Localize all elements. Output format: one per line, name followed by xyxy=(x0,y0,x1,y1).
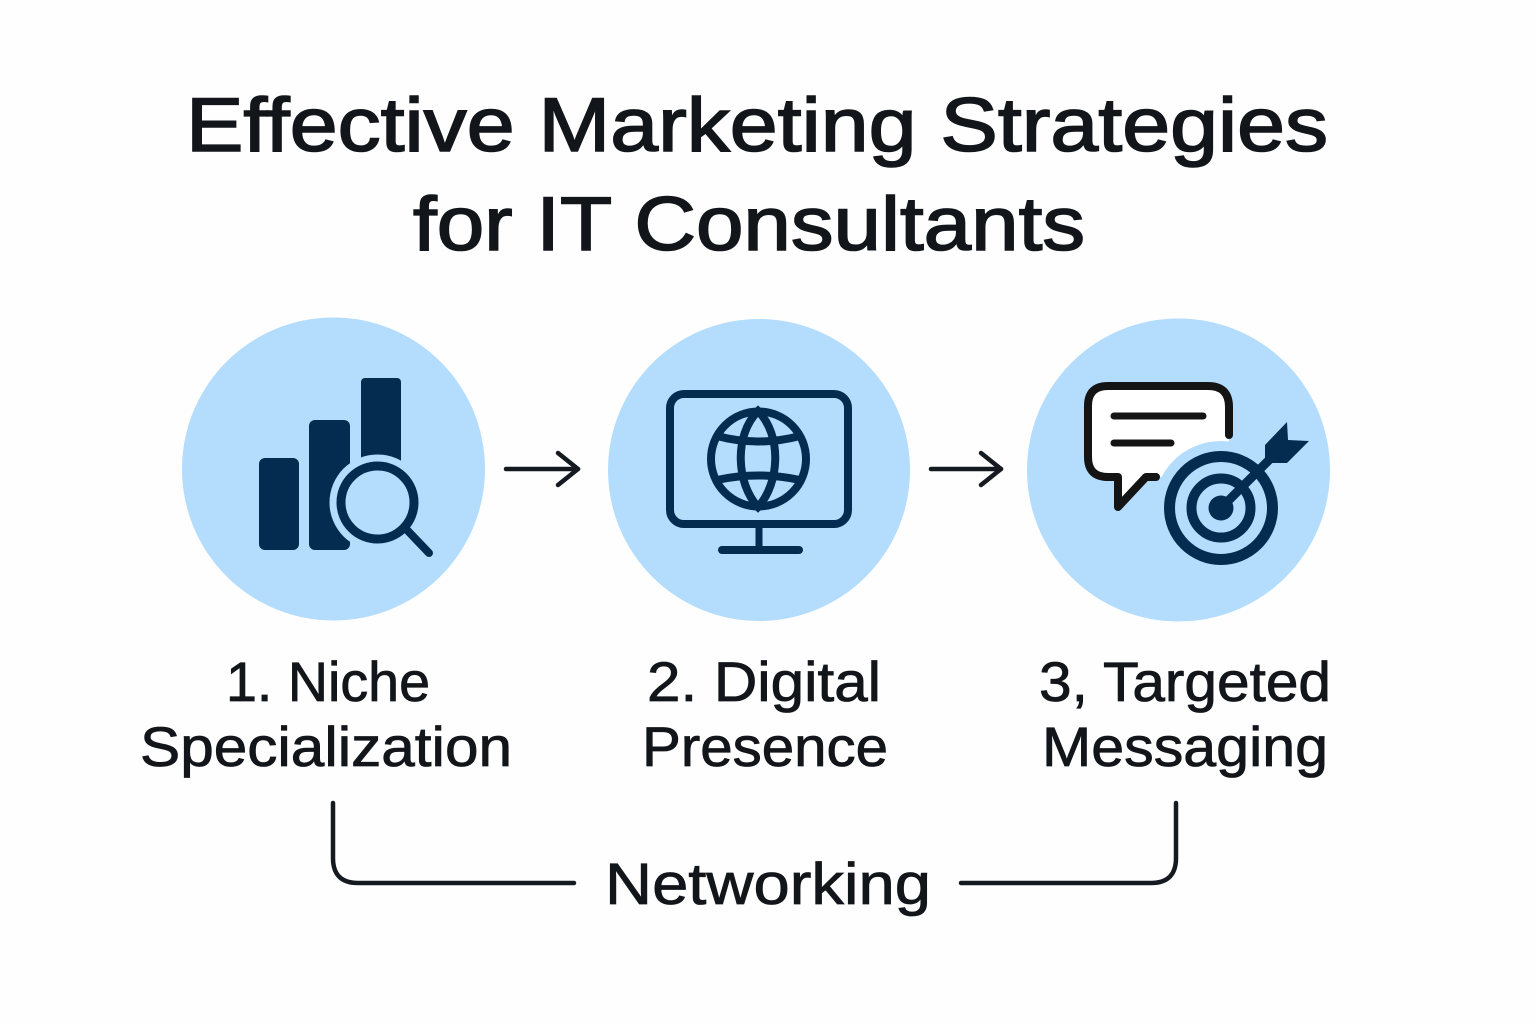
label: networking: Networking xyxy=(605,852,931,917)
icon: digital presence circle xyxy=(608,319,910,621)
arrow: step 2 to step 3 xyxy=(931,453,1001,485)
title xyxy=(186,83,1328,267)
bracket: right networking connector xyxy=(961,803,1176,883)
arrow: step 1 to step 2 xyxy=(506,453,578,485)
bracket: left networking connector xyxy=(333,803,574,883)
label: step 1 xyxy=(140,650,512,778)
label: step 2: 2. Digital xyxy=(647,650,881,713)
label: step 2: Presence xyxy=(642,715,888,778)
label: step 3: 3, Targeted xyxy=(1039,650,1331,713)
title: for IT Consultants xyxy=(413,182,1085,267)
label: step 3 xyxy=(1039,650,1331,778)
label: step 2 xyxy=(642,650,888,778)
title: Effective Marketing Strategies xyxy=(186,83,1328,168)
icon: targeted messaging circle xyxy=(1027,318,1330,622)
label: step 3: Messaging xyxy=(1042,715,1328,778)
icon: niche specialization circle xyxy=(182,318,485,620)
label: step 1: Specialization xyxy=(140,715,512,778)
label: step 1: 1. Niche xyxy=(226,650,430,713)
